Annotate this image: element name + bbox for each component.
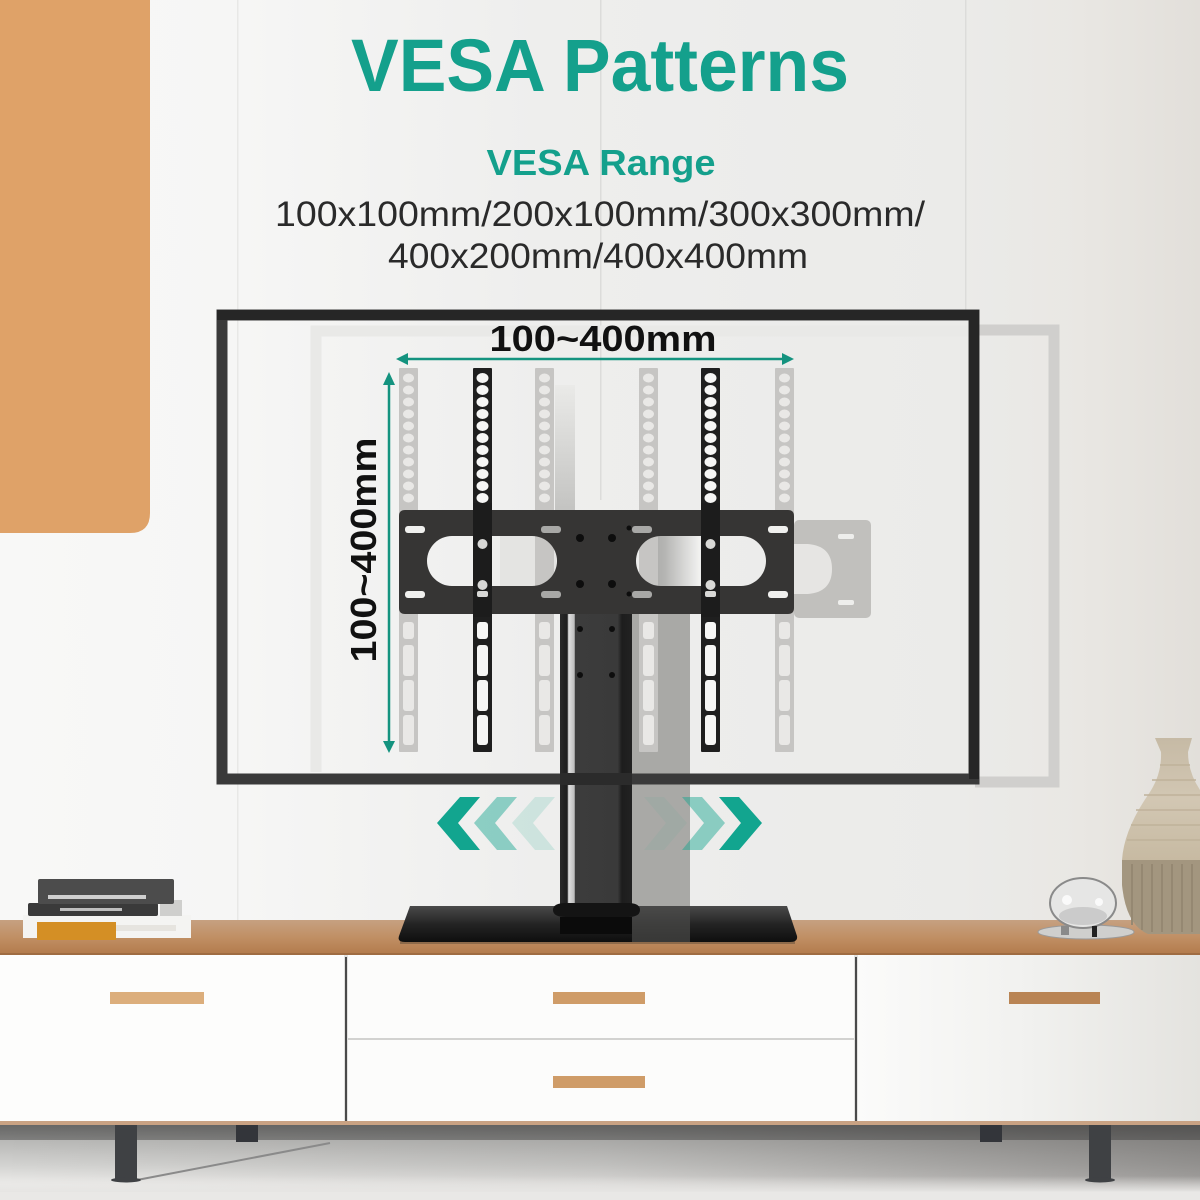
orange accent wall panel [0, 0, 150, 533]
icon: ceramic vase [1122, 738, 1200, 934]
ghost stand column [500, 385, 700, 906]
cabinet [0, 920, 1200, 1125]
left motion chevrons [437, 797, 555, 850]
ghost TV frame [316, 330, 1054, 782]
icon: glass bowl [1038, 878, 1134, 939]
icon: stack of books [23, 879, 191, 940]
vertical dimension arrow [383, 372, 395, 753]
label: vertical 100~400mm: 100~400mm [343, 438, 384, 662]
right motion chevrons [644, 797, 762, 850]
text block: VESA sizes [275, 195, 925, 276]
ghost mounting plate [794, 520, 871, 618]
black vertical rails [473, 368, 720, 752]
background wall [0, 0, 1200, 930]
cabinet legs [111, 1125, 1115, 1182]
horizontal dimension arrow [396, 353, 794, 365]
TV stand column [560, 612, 632, 908]
title: VESA Patterns [351, 24, 849, 107]
drawer handles [110, 992, 1100, 1088]
text block: VESA sizes: 100x100mm/200x100mm/300x300mm/ [275, 195, 925, 234]
base shadow on cabinet [400, 940, 795, 944]
floor [0, 1125, 1200, 1200]
text block: VESA sizes: 400x200mm/400x400mm [388, 237, 808, 276]
ghost vertical rails [399, 368, 794, 752]
mounting plate [399, 510, 794, 614]
subheading: VESA Range: VESA Range [486, 142, 716, 183]
TV outline frame [217, 315, 974, 779]
label: horizontal 100~400mm: 100~400mm [490, 318, 716, 359]
glass stand base [399, 903, 797, 942]
